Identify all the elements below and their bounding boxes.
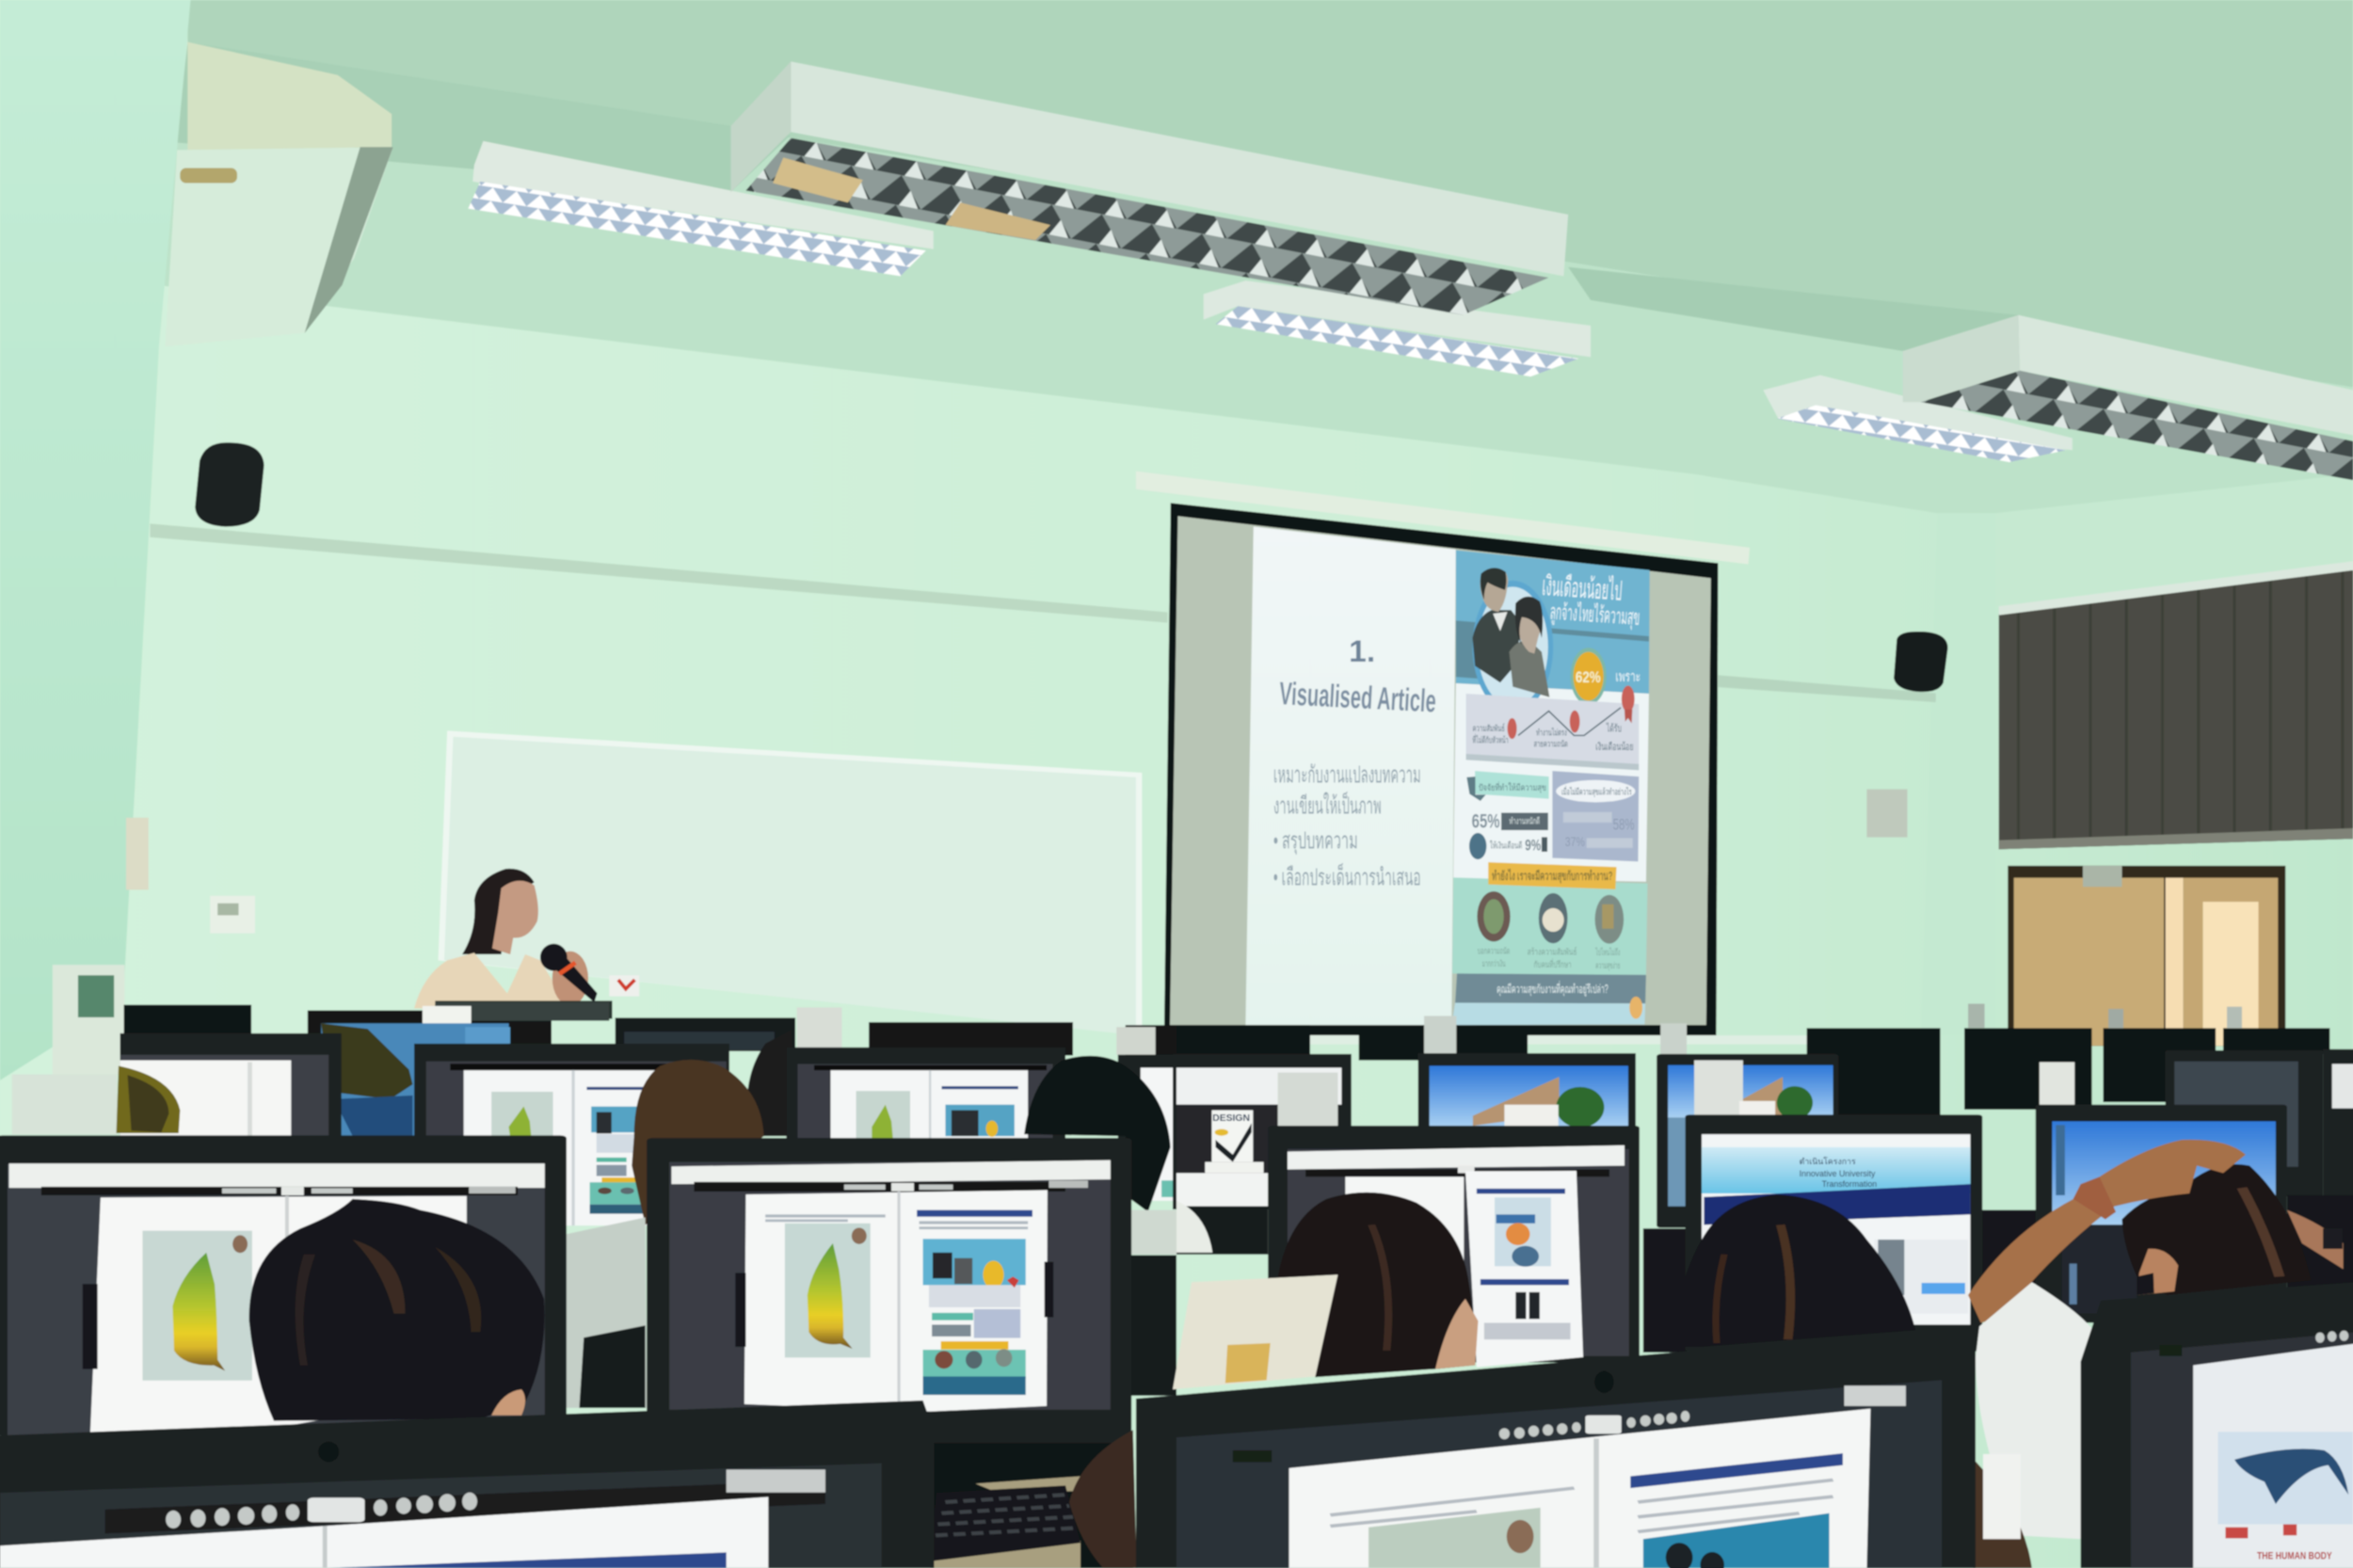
ceiling light 5 bbox=[1903, 315, 2353, 480]
projector screen housing bbox=[1136, 472, 1750, 564]
student hair lower bbox=[1069, 1430, 1137, 1568]
slide number: 1. bbox=[1349, 635, 1375, 669]
mini infographic bbox=[923, 1239, 1026, 1395]
text lines bbox=[1330, 1480, 1833, 1531]
person long hair center bbox=[1278, 1192, 1478, 1377]
unhappy statistics panel bbox=[1552, 771, 1639, 861]
whiteboard bbox=[439, 730, 1142, 1035]
illustrated couple bbox=[1472, 568, 1553, 712]
gaps furniture dark bbox=[1643, 1195, 2353, 1352]
raised arm and hand bbox=[1968, 1140, 2246, 1322]
tip captions: กับคนที่ปรึกษา bbox=[1533, 958, 1572, 970]
wall thermostat and switches bbox=[12, 818, 255, 1134]
middle monitor with people document bbox=[1268, 1126, 1640, 1368]
woman bbox=[1509, 641, 1549, 697]
man bbox=[1472, 610, 1522, 682]
face bbox=[492, 881, 538, 954]
65 percent stat: ทำงานหนักดี bbox=[1509, 816, 1540, 827]
second row monitor 1 bbox=[117, 1033, 342, 1137]
door bbox=[2008, 866, 2285, 1046]
ranking panel: ที่ไม่ดีกับหัวหน้า bbox=[1472, 734, 1509, 746]
monitor frame bbox=[647, 1138, 1131, 1445]
paper sheet bbox=[1173, 1274, 1337, 1389]
keyboard on desk bbox=[931, 1443, 1133, 1568]
toolbar buttons bbox=[1499, 1411, 1689, 1439]
whale poster title: THE HUMAN BODY bbox=[2257, 1550, 2332, 1561]
hair bbox=[462, 869, 535, 954]
monitor screen bbox=[669, 1162, 1111, 1410]
65 percent stat bbox=[1472, 809, 1548, 832]
slide body text: • สรุปบทความ bbox=[1273, 828, 1358, 856]
monitor far right front bbox=[2081, 1282, 2353, 1568]
monitor with design document bbox=[1173, 1054, 1352, 1255]
middle monitor with university website bbox=[1685, 1114, 1982, 1352]
slide title: Visualised Article bbox=[1278, 677, 1437, 719]
document blue heading bbox=[917, 1210, 1032, 1217]
9 percent stat and sad face: 9% bbox=[1525, 837, 1541, 854]
blue heading bbox=[330, 1552, 727, 1568]
air conditioner bbox=[165, 42, 393, 346]
presenter bbox=[414, 869, 613, 1019]
wall box bbox=[1866, 790, 1907, 838]
infographic on slide bbox=[1451, 551, 1650, 1025]
ceiling light 4 bbox=[1763, 376, 2073, 462]
tip captions: มากกว่าเงิน bbox=[1482, 959, 1506, 969]
slide body text: งานเขียนให้เป็นภาพ bbox=[1273, 791, 1382, 820]
webcam bbox=[318, 1442, 339, 1463]
bracelet bbox=[2073, 1176, 2116, 1219]
ranking panel: สายความถนัด bbox=[1533, 739, 1568, 749]
unhappy statistics panel: เมื่อไม่มีความสุขแล้วทำอย่างไร bbox=[1561, 785, 1632, 797]
infographic preview bbox=[1643, 1513, 1830, 1568]
person with black hair bbox=[1024, 1056, 1176, 1255]
document pages bbox=[1289, 1409, 1870, 1568]
projector screen with slide bbox=[1164, 503, 1718, 1036]
bottom center monitor bbox=[1136, 1326, 1976, 1568]
infographic footer bbox=[1451, 973, 1646, 1025]
wallpaper monitor 1 bbox=[1418, 1053, 1636, 1128]
student with raised arm bbox=[1968, 1140, 2344, 1539]
person with brown hair bbox=[632, 1060, 764, 1224]
speaker right bbox=[1894, 632, 1948, 692]
screen rail below bbox=[1152, 1035, 1903, 1045]
monitor screen bbox=[8, 1164, 545, 1435]
bottom left monitor bbox=[0, 1400, 935, 1568]
slide body text: เหมาะกับงานแปลงบทความ bbox=[1273, 762, 1421, 788]
tip captions bbox=[1478, 947, 1620, 971]
infographic body bbox=[1453, 683, 1649, 882]
toolbar buttons bbox=[166, 1493, 477, 1528]
browser bar bbox=[9, 1163, 545, 1188]
document page bbox=[0, 1497, 768, 1568]
shirt collar lower bbox=[1983, 1454, 2021, 1539]
back row place cards bbox=[1424, 1003, 2242, 1109]
9 percent stat and sad face: ให้เงินเดือนดี bbox=[1490, 840, 1522, 851]
speaker left bbox=[195, 442, 264, 527]
seated person far left center bbox=[747, 1030, 797, 1136]
ranking panel: ความสัมพันธ์ bbox=[1472, 723, 1505, 734]
62 percent badge: 62% bbox=[1576, 668, 1601, 686]
red X sign bbox=[609, 975, 639, 997]
shirt and chair behind bbox=[563, 1218, 1176, 1408]
front monitor center bbox=[647, 1138, 1131, 1487]
face and mask bbox=[2137, 1249, 2178, 1295]
projector screen with slide: ลูกจ้างไทยไร้ความสุข bbox=[1549, 600, 1641, 632]
hair lower center bbox=[1974, 1462, 2032, 1568]
slide body text bbox=[1273, 762, 1421, 890]
front monitor left bbox=[0, 1135, 567, 1437]
banana poster bbox=[785, 1224, 871, 1357]
infographic header bbox=[1456, 551, 1650, 694]
unhappy statistics panel: 37% bbox=[1565, 835, 1585, 850]
website subhead second line: Transformation bbox=[1822, 1179, 1877, 1189]
person long hair right center bbox=[1672, 1194, 1915, 1347]
whale illustration bbox=[2218, 1432, 2353, 1539]
mini poster bbox=[1495, 1197, 1551, 1267]
reader toolbar bbox=[694, 1180, 1088, 1192]
screen frame bbox=[1164, 503, 1718, 1036]
ranking panel: เงินเดือนน้อย bbox=[1595, 741, 1633, 753]
banana poster preview bbox=[1369, 1508, 1541, 1568]
left pillar bbox=[0, 0, 190, 1080]
ceiling light main bbox=[730, 61, 1568, 315]
website headline: ดำเนินโครงการ bbox=[1800, 1157, 1856, 1166]
blue heading bbox=[1630, 1453, 1843, 1488]
infographic footer: คุณมีความสุขกับงานที่คุณทำอยู่รึเปล่า? bbox=[1497, 981, 1609, 997]
white shirt bbox=[1976, 1282, 2093, 1539]
62 percent badge: เพราะ bbox=[1615, 669, 1641, 685]
banana poster bbox=[142, 1231, 252, 1381]
ceiling light 3 bbox=[1204, 280, 1591, 376]
62 percent badge bbox=[1571, 648, 1641, 705]
wallpaper monitor 2 bbox=[1657, 1054, 1838, 1228]
ranking panel: ทำงานไม่ตรง bbox=[1536, 728, 1567, 738]
microphone bbox=[545, 949, 598, 1002]
design book title: DESIGN bbox=[1212, 1113, 1250, 1124]
wallpaper monitor front right bbox=[2036, 1105, 2287, 1322]
tip captions: สร้างความสัมพันธ์ bbox=[1528, 947, 1577, 957]
monitor stand bbox=[935, 1406, 1114, 1487]
open document page bbox=[744, 1190, 1048, 1412]
tip captions: ไปไหนไม่ถึง bbox=[1595, 947, 1620, 958]
browser bar bbox=[671, 1160, 1111, 1184]
dark screen bbox=[1176, 1380, 1942, 1568]
screen surface bbox=[1170, 516, 1711, 1025]
second row monitor 2 bbox=[414, 1044, 729, 1225]
small on-screen labels bbox=[1212, 1113, 2332, 1561]
monitor frame bbox=[0, 1135, 567, 1435]
slide white panel bbox=[1245, 527, 1456, 1025]
document page bbox=[2193, 1343, 2353, 1568]
toolbar buttons bbox=[2315, 1331, 2348, 1343]
unhappy statistics panel: 58% bbox=[1613, 815, 1635, 833]
open document page bbox=[90, 1196, 467, 1437]
yellow callout: ทำยังไง เราจะมีความสุขกับการทำงาน? bbox=[1492, 868, 1612, 884]
happy statistics banner: ปัจจัยที่ทำให้มีความสุข bbox=[1479, 781, 1546, 793]
tip captions: บอกความถนัด bbox=[1478, 947, 1510, 957]
nav handles bbox=[735, 1272, 745, 1347]
back row monitors left bbox=[124, 1002, 1176, 1057]
second row monitor 4 edge bbox=[1118, 1055, 1176, 1201]
tip icons bbox=[1477, 891, 1624, 944]
other arm bbox=[2287, 1210, 2344, 1270]
reader toolbar bbox=[41, 1187, 518, 1195]
lake wallpaper monitor bbox=[308, 1023, 510, 1136]
left half computer rows bbox=[0, 1002, 1176, 1568]
infographic on slide: เงินเดือนน้อยไป bbox=[1541, 570, 1624, 607]
9 percent stat and sad face bbox=[1469, 833, 1547, 859]
ceiling light 2 bbox=[468, 141, 934, 276]
restroom icons bbox=[1515, 1292, 1540, 1320]
65 percent stat: 65% bbox=[1472, 809, 1500, 832]
ranking panel: ได้รับ bbox=[1606, 723, 1622, 735]
back row monitors right bbox=[1176, 1025, 2329, 1115]
right half computer rows bbox=[1136, 1003, 2353, 1568]
podium bbox=[435, 1000, 613, 1019]
person with dark short hair bbox=[249, 1199, 545, 1421]
infographic on slide: ความสุขง่าย bbox=[1595, 961, 1620, 971]
hair bbox=[2121, 1164, 2311, 1295]
webcam bbox=[1594, 1371, 1614, 1393]
blouse bbox=[414, 952, 564, 1008]
dark gray monitor back right bbox=[2166, 1049, 2353, 1208]
happy statistics banner bbox=[1466, 771, 1549, 801]
nav handles bbox=[83, 1284, 98, 1369]
second row monitor 3 bbox=[786, 1048, 1065, 1140]
bottom teal section bbox=[1452, 877, 1647, 975]
yellow callout bbox=[1488, 862, 1617, 889]
window blinds bbox=[1999, 561, 2353, 849]
page text lines bbox=[765, 1214, 1028, 1229]
hand bbox=[552, 952, 588, 1005]
ranking panel bbox=[1466, 686, 1639, 770]
slide body text: • เลือกประเด็นการนำเสนอ bbox=[1273, 862, 1421, 890]
website subhead: Innovative University bbox=[1800, 1169, 1876, 1178]
dark screen bbox=[0, 1464, 882, 1568]
toolbar strip bbox=[105, 1480, 825, 1533]
